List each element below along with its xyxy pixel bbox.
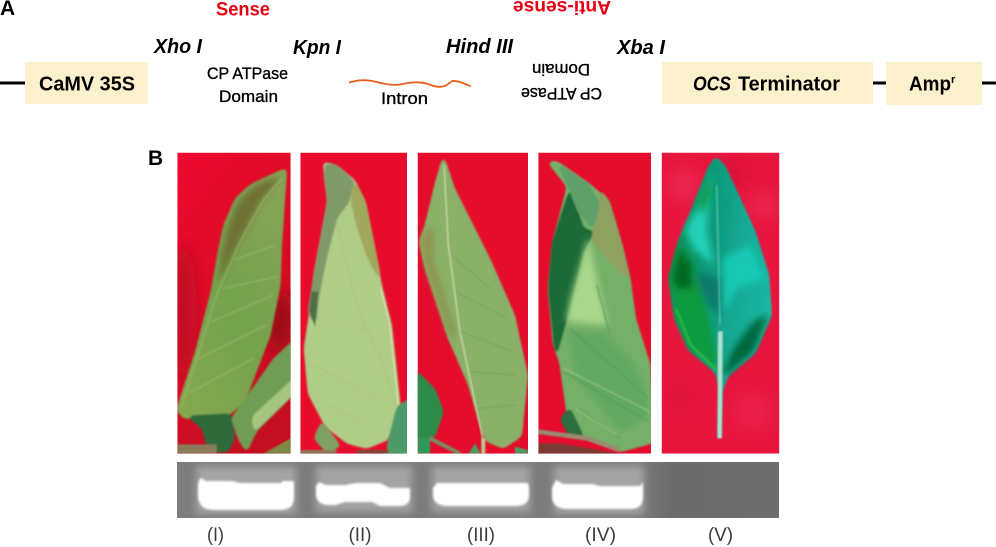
lane label V: (V) [708, 525, 733, 546]
right backbone line [982, 82, 996, 84]
text: CP ATPase Domain (sense): Domain [219, 88, 278, 106]
connector line [873, 82, 886, 84]
box: CaMV 35S promoter: CaMV 35S [39, 74, 135, 96]
leaf photo II [300, 153, 412, 458]
glow above and around bands [196, 466, 644, 514]
restriction site: Kpn I: Kpn I [293, 37, 341, 59]
lane label I: (I) [207, 525, 224, 546]
box: Amp resistance: r [951, 74, 956, 86]
bright DNA bands [198, 478, 643, 510]
left backbone line [0, 82, 25, 84]
gel image with bands [177, 462, 779, 518]
leaf photo V [662, 153, 779, 454]
text: CP ATPase Domain (anti-sense, inverted): CP ATPase [521, 84, 602, 102]
restriction site: Hind III: Hind III [446, 36, 513, 58]
text: CP ATPase Domain (anti-sense, inverted): Domain [532, 60, 590, 78]
text: CP ATPase Domain (sense) [207, 65, 288, 106]
lane label II: (II) [348, 525, 372, 546]
box: OCS Terminator: Terminator [738, 74, 840, 96]
panel label B: B [148, 147, 163, 170]
intron: wavy line and label [349, 80, 471, 108]
intron: wavy line and label: Intron [381, 90, 428, 108]
box: Amp resistance: Amp [909, 74, 951, 96]
lane label IV: (IV) [585, 525, 616, 546]
box: Amp resistance [886, 62, 982, 105]
restriction site: Xba I: Xba I [616, 37, 665, 59]
leaf photo III [415, 153, 528, 454]
text: CP ATPase Domain (sense): CP ATPase [207, 65, 288, 83]
leaf photo I [170, 153, 297, 454]
restriction site: Xho I: Xho I [153, 36, 202, 58]
box: CaMV 35S promoter [25, 62, 148, 104]
text: CP ATPase Domain (anti-sense, inverted) [521, 60, 602, 102]
leaf photo IV [538, 153, 653, 454]
box: OCS Terminator: OCS [693, 74, 732, 96]
box: OCS Terminator [662, 62, 873, 104]
lane label III: (III) [467, 525, 495, 546]
